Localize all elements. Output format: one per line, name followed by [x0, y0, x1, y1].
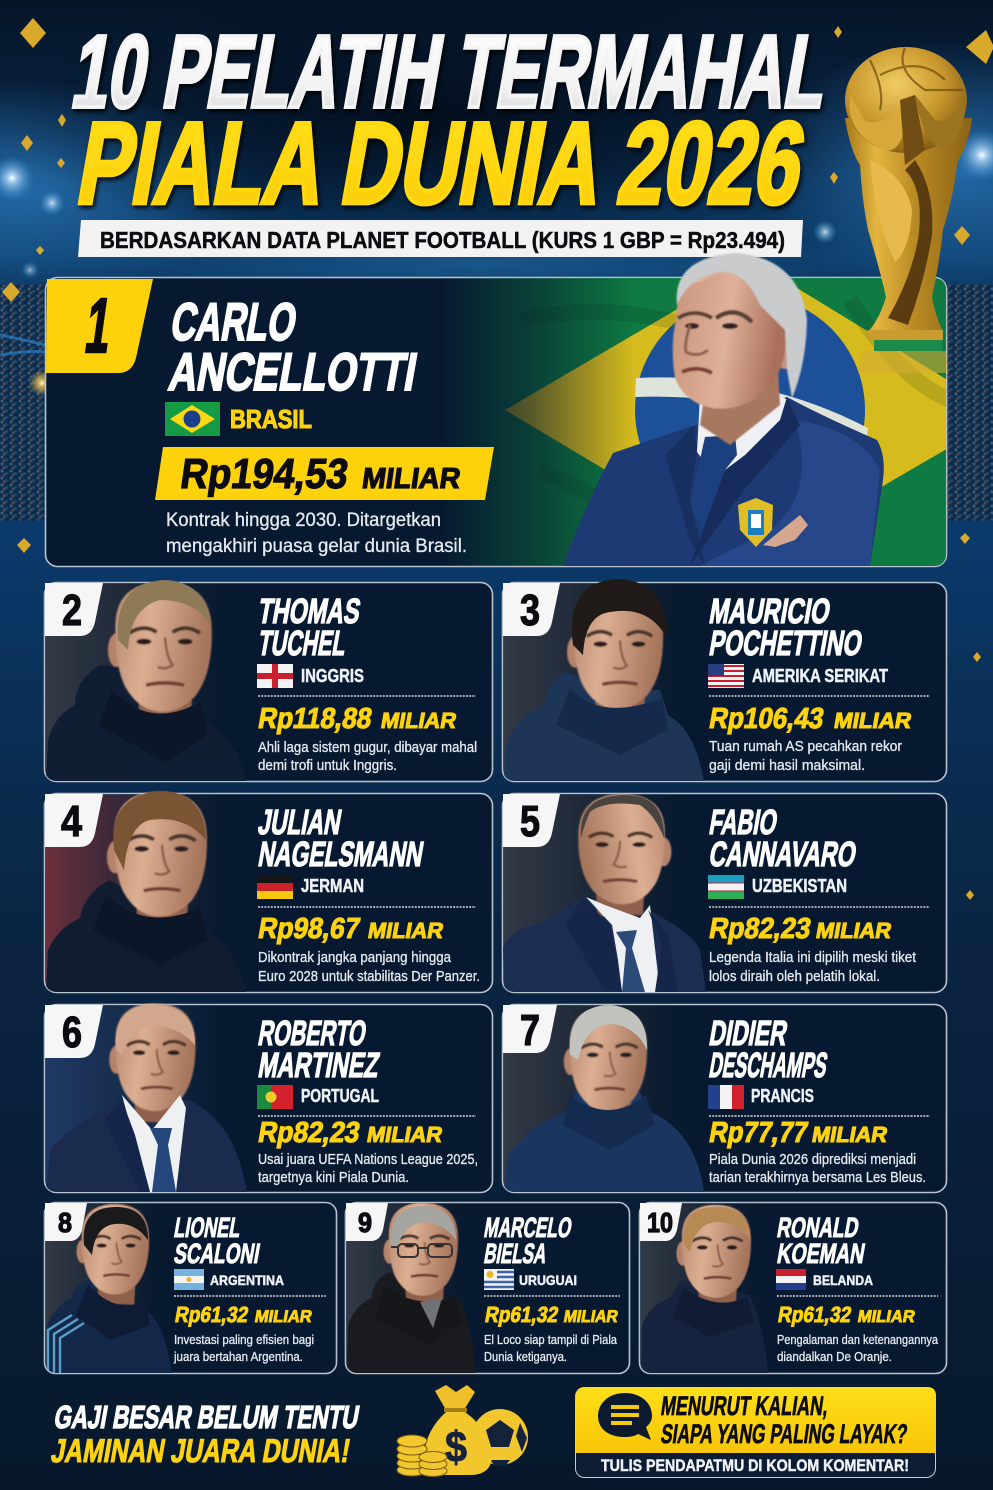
price band: [155, 447, 494, 500]
salary: MILIAR: [814, 918, 893, 943]
description: juara bertahan Argentina.: [173, 1350, 303, 1364]
panel: rank 3 Mauricio Pochettino: [502, 579, 946, 782]
flag: Portugal: [257, 1085, 293, 1109]
panel: rank 10 Ronald Koeman: [640, 1202, 946, 1374]
rank badge 3: [503, 583, 560, 636]
panel: rank 8 Lionel Scaloni: [44, 1202, 336, 1374]
Brazil flag backdrop: [462, 278, 946, 566]
name: [707, 1014, 830, 1085]
panel: rank 7 Didier Deschamps: [502, 1004, 946, 1192]
name: NAGELSMANN: [256, 835, 426, 874]
salary: Rp61,32: [173, 1302, 250, 1327]
rank badge 9: 9: [358, 1207, 372, 1238]
name: [707, 803, 859, 874]
name: THOMAS: [256, 592, 363, 631]
question text: MENURUT KALIAN,: [659, 1390, 830, 1421]
portrait: Didier Deschamps: [504, 1005, 704, 1192]
description: Pengalaman dan ketenangannya: [777, 1333, 938, 1347]
name: [775, 1211, 868, 1269]
rank badge 1: [46, 279, 153, 373]
description: [484, 1333, 617, 1364]
name: [172, 1211, 263, 1269]
description: Dunia ketiganya.: [484, 1350, 567, 1364]
description: Piala Dunia 2026 diprediksi menjadi: [709, 1152, 916, 1168]
description: [709, 739, 902, 774]
rank badge 2: 2: [62, 586, 82, 635]
call to action box: [576, 1387, 936, 1478]
icon: money bag, coins and football: $: [445, 1423, 467, 1472]
country: URUGUAI: [519, 1272, 577, 1288]
flag: Netherlands: [776, 1269, 806, 1290]
name: MARTINEZ: [256, 1046, 382, 1085]
panel: rank 6 Roberto Martinez: [44, 1003, 492, 1192]
panel: rank 4 Julian Nagelsmann: [44, 791, 492, 992]
trophy: [845, 47, 972, 373]
name: DESCHAMPS: [707, 1046, 830, 1085]
salary: [707, 1117, 889, 1149]
rank badge 4: 4: [61, 797, 82, 846]
salary: Rp106,43: [707, 703, 826, 735]
country: PORTUGAL: [301, 1086, 379, 1106]
salary: [707, 913, 893, 945]
portrait: Julian Nagelsmann: [46, 791, 246, 992]
name: [256, 1014, 382, 1085]
name: ROBERTO: [256, 1014, 369, 1053]
salary: [173, 1302, 314, 1327]
rank badge 3: 3: [520, 586, 540, 635]
description: [173, 1333, 314, 1364]
name: JULIAN: [256, 803, 344, 842]
description: [709, 1152, 926, 1186]
salary: [707, 703, 913, 735]
flag: France: [708, 1085, 744, 1109]
name: LIONEL: [172, 1211, 244, 1243]
country: ARGENTINA: [210, 1272, 284, 1288]
salary: [256, 703, 458, 735]
description: [777, 1333, 938, 1364]
salary: Rp82,23: [256, 1117, 362, 1149]
rank badge 8: [45, 1203, 87, 1241]
salary: Rp61,32: [483, 1302, 560, 1327]
description: Usai juara UEFA Nations League 2025,: [258, 1152, 478, 1168]
description: tarian terakhirnya bersama Les Bleus.: [709, 1170, 926, 1186]
name: [707, 592, 865, 663]
question text: [659, 1390, 909, 1449]
portrait: Roberto Martinez: [46, 1003, 247, 1192]
country: BRASIL: [230, 404, 312, 434]
name: [256, 803, 426, 874]
rank badge 8: 8: [58, 1207, 72, 1238]
rank badge 4: [45, 794, 103, 847]
name: [482, 1211, 575, 1269]
name: TUCHEL: [256, 624, 349, 663]
description: diandalkan De Oranje.: [777, 1350, 892, 1364]
description: Kontrak hingga 2030. Ditargetkan: [166, 510, 441, 531]
price band: MILIAR: [360, 463, 462, 495]
salary: Rp61,32: [776, 1302, 853, 1327]
description: [258, 1152, 478, 1186]
salary: [483, 1302, 620, 1327]
name: CANNAVARO: [707, 835, 859, 874]
rank badge 5: [503, 794, 560, 847]
name: POCHETTINO: [707, 624, 865, 663]
name: [165, 293, 421, 402]
salary: Rp98,67: [256, 913, 362, 945]
name: MAURICIO: [707, 592, 833, 631]
portrait: Fabio Cannavaro: [503, 794, 706, 992]
footer slogan: [49, 1399, 362, 1470]
salary: MILIAR: [856, 1306, 917, 1326]
description: targetnya kini Piala Dunia.: [258, 1170, 409, 1186]
panel: rank 1 Carlo Ancellotti: [46, 47, 993, 568]
description: mengakhiri puasa gelar dunia Brasil.: [166, 536, 467, 557]
description: Legenda Italia ini dipilih meski tiket: [709, 950, 916, 966]
icon: speech bubble: [598, 1393, 652, 1440]
country: INGGRIS: [301, 666, 364, 686]
country: JERMAN: [301, 876, 364, 896]
title: [65, 14, 837, 228]
name: BIELSA: [482, 1237, 550, 1269]
name: DIDIER: [707, 1014, 790, 1053]
description: lolos diraih oleh pelatih lokal.: [709, 969, 880, 985]
footer slogan: JAMINAN JUARA DUNIA!: [49, 1433, 353, 1470]
name: MARCELO: [482, 1211, 575, 1243]
name: [256, 592, 363, 663]
subtitle strip: [78, 220, 803, 257]
panel: rank 5 Fabio Cannavaro: [502, 794, 946, 992]
description: Investasi paling efisien bagi: [174, 1333, 314, 1347]
salary: Rp82,23: [707, 913, 813, 945]
flag: USA: [708, 664, 744, 688]
salary: MILIAR: [379, 708, 458, 733]
decorative gold confetti: [2, 18, 993, 900]
rank badge 6: 6: [62, 1008, 82, 1057]
description: demi trofi untuk Inggris.: [258, 758, 397, 774]
salary: [256, 1117, 444, 1149]
country: AMERIKA SERIKAT: [752, 666, 888, 686]
rank badge 6: [45, 1005, 103, 1058]
salary: MILIAR: [832, 708, 913, 733]
portrait: Ronald Koeman: [641, 1204, 771, 1374]
description: Tuan rumah AS pecahkan rekor: [709, 739, 902, 755]
portrait: Carlo Ancellotti: [563, 253, 884, 566]
rank badge 1: 1: [81, 283, 117, 369]
salary: [256, 913, 445, 945]
salary: [776, 1302, 917, 1327]
flag: Uruguay: [484, 1269, 514, 1290]
flag: Uzbekistan: [708, 875, 744, 899]
salary: Rp118,88: [256, 703, 374, 735]
salary: MILIAR: [365, 1122, 444, 1147]
name: ANCELLOTTI: [165, 343, 421, 402]
footer slogan: GAJI BESAR BELUM TENTU: [52, 1399, 362, 1435]
rank badge 10: 10: [647, 1207, 673, 1238]
flag: Argentina: [174, 1269, 204, 1290]
description: gaji demi hasil maksimal.: [709, 758, 865, 774]
prompt: TULIS PENDAPATMU DI KOLOM KOMENTAR!: [601, 1456, 909, 1475]
flag: Germany: [257, 875, 293, 899]
salary: MILIAR: [562, 1306, 620, 1326]
name: RONALD: [775, 1211, 862, 1243]
flag: England: [257, 664, 293, 688]
rank badge 9: [346, 1203, 388, 1241]
country: BELANDA: [813, 1272, 873, 1288]
description: [258, 740, 477, 774]
salary: MILIAR: [366, 918, 445, 943]
portrait: Thomas Tuchel: [46, 580, 246, 781]
salary: MILIAR: [810, 1122, 889, 1147]
rank badge 7: 7: [520, 1006, 540, 1055]
panel: rank 2 Thomas Tuchel: [44, 580, 492, 782]
rank badge 2: [45, 583, 103, 636]
portrait: Marcelo Bielsa: [347, 1203, 477, 1374]
rank badge 5: 5: [520, 797, 540, 846]
name: FABIO: [707, 803, 780, 842]
panel: rank 9 Marcelo Bielsa: [346, 1202, 630, 1374]
name: CARLO: [167, 293, 301, 352]
description: Dikontrak jangka panjang hingga: [258, 950, 452, 966]
description: [709, 950, 916, 985]
description: [258, 950, 480, 985]
price band: Rp194,53: [178, 450, 351, 497]
description: El Loco siap tampil di Piala: [484, 1333, 617, 1347]
icon: money bag, coins and football: [397, 1385, 528, 1476]
country: UZBEKISTAN: [752, 876, 847, 896]
description: Euro 2028 untuk stabilitas Der Panzer.: [258, 969, 480, 985]
name: SCALONI: [172, 1237, 263, 1269]
description: Ahli laga sistem gugur, dibayar mahal: [258, 740, 477, 756]
subtitle strip: BERDASARKAN DATA PLANET FOOTBALL (KURS 1 GBP = Rp23.494): [100, 227, 785, 253]
flag: Brazil: [165, 402, 220, 436]
portrait: Lionel Scaloni: [46, 1204, 172, 1374]
salary: Rp77,77: [707, 1117, 810, 1149]
salary: MILIAR: [253, 1306, 314, 1326]
name: KOEMAN: [775, 1237, 868, 1269]
rank badge 10: [640, 1203, 682, 1241]
rank badge 7: [503, 1005, 557, 1055]
portrait: Mauricio Pochettino: [504, 579, 704, 781]
country: PRANCIS: [751, 1086, 814, 1106]
description: [166, 510, 467, 557]
